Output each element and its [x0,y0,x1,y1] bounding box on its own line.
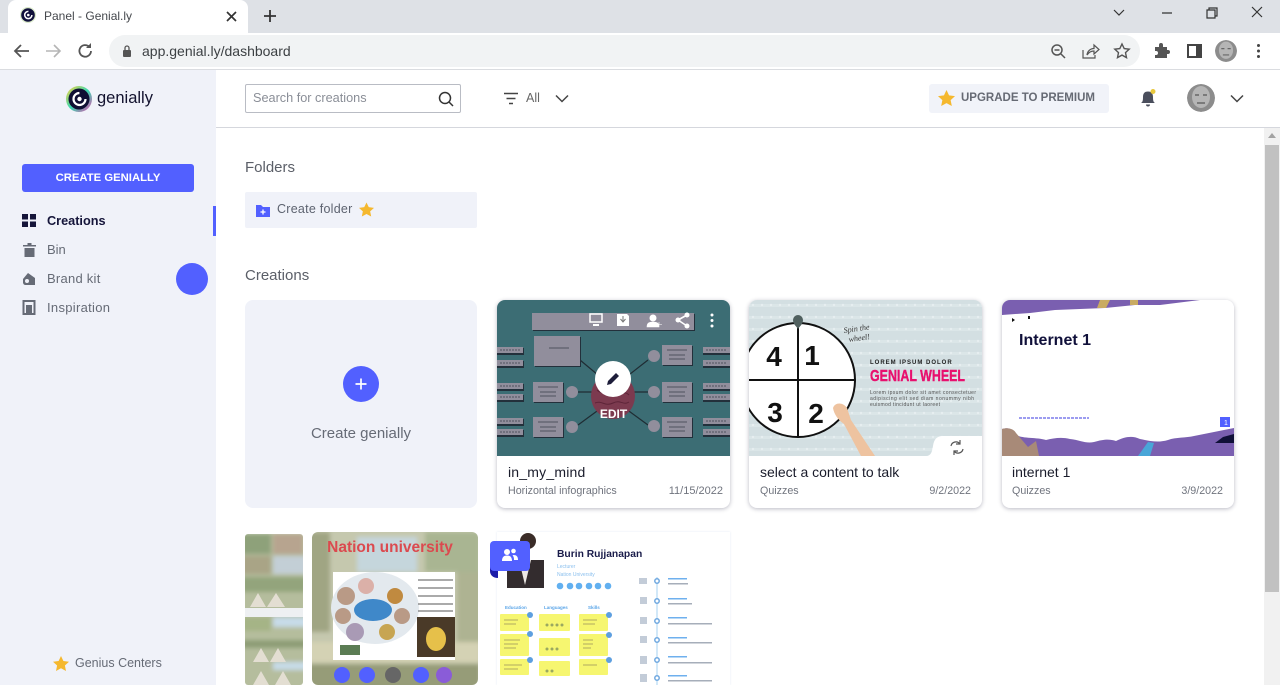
address bar [109,35,1140,67]
thumbnail: genial wheel: euismod tincidunt ut laoreet [870,402,941,408]
nav: brand kit: Brand kit [47,271,101,286]
card title: in_my_mind [508,464,585,480]
logo text: genially [97,89,153,107]
card date: 9/2/2022 [929,485,971,497]
thumbnail: internet 1: 1 [1224,420,1228,427]
card: resume thumbnail: Education [505,605,527,610]
icon: new tab [264,10,276,22]
card type: Quizzes [1012,485,1051,497]
icon: side panel [1187,44,1202,58]
icons: address bar actions [1051,42,1131,59]
card: resume thumbnail: Skills [588,605,600,610]
card: select a content to talk [749,300,982,508]
window controls [1114,6,1262,19]
card title: internet 1 [1012,464,1070,480]
card: nation university thumbnail [245,532,478,685]
nav: creations: Creations [47,214,106,228]
icon: users [502,548,518,561]
nav: bin: Bin [47,242,66,257]
card: in_my_mind [497,300,730,508]
search box: Search for creations [253,91,367,105]
browser toolbar [0,33,1280,69]
genius centers link: Genius Centers [75,656,162,670]
thumbnail: genial wheel: adipiscing elit sed diam nonummy nibh [870,396,974,402]
sidebar [0,70,216,685]
icon: tab close [226,11,236,22]
card title: select a content to talk [760,464,899,480]
filter [504,91,568,105]
icon: nav buttons [14,43,92,58]
upgrade button: UPGRADE TO PREMIUM [961,92,1095,104]
card: internet 1 [1002,300,1234,508]
create folder button [245,192,477,228]
edit label: EDIT [600,407,627,421]
create folder button: Create folder [277,202,353,216]
icon: lock [123,45,131,57]
url: app.genial.ly/dashboard [142,43,291,59]
nav: inspiration: Inspiration [47,300,110,315]
card date: 11/15/2022 [669,485,723,497]
active tab [8,0,248,33]
create label: Create genially [311,425,411,442]
thumbnail: genial wheel: 4 [766,341,782,372]
scrollbar [1264,128,1280,685]
thumbnail: genial wheel: LOREM IPSUM DOLOR [870,360,953,366]
nav: bin [23,242,66,257]
browser tab strip [0,0,1280,33]
floating circle [176,263,208,295]
card: resume thumbnail: Languages [544,605,568,610]
card: resume thumbnail: Nation University [557,572,595,578]
tab title: Panel - Genial.ly [44,9,132,23]
nav: brand kit [23,271,101,286]
icon: user menu chevron [1230,95,1244,102]
card: resume thumbnail: Burin Rujjanapan [557,549,642,560]
thumbnail: internet 1 [1002,300,1234,456]
thumbnail: internet 1: Internet 1 [1019,332,1091,349]
thumbnail: genial wheel [749,300,982,456]
icon: notifications [1141,89,1156,106]
browser profile avatar [1215,40,1237,62]
icon: tab favicon [20,7,36,23]
creations heading: Creations [245,267,309,284]
plus button [343,366,379,402]
thumbnail hover icons [589,312,714,328]
shared badge [490,541,530,578]
user avatar [1187,84,1215,112]
thumbnail: genial wheel: 2 [808,398,824,429]
thumbnail: genial wheel: Spin the [843,322,870,335]
icon: star [359,202,374,216]
card type: Horizontal infographics [508,485,617,497]
icon: extensions [1155,43,1170,58]
thumbnail: genial wheel: wheel! [848,332,871,344]
card: resume thumbnail: Lecturer [557,564,576,570]
icon: browser menu [1257,44,1260,58]
create button: CREATE GENIALLY [56,172,160,184]
card type: Quizzes [760,485,799,497]
thumbnail: genial wheel: 3 [767,397,783,428]
icon: search [438,92,454,106]
active nav marker [213,206,216,236]
card date: 3/9/2022 [1181,485,1223,497]
thumbnail: mind map [497,300,730,456]
card: resume thumbnail [497,532,730,685]
thumbnail: genial wheel: 1 [804,340,820,371]
edit button [595,361,631,397]
create button [22,164,194,192]
thumbnail: genial wheel: Lorem ipsum dolor sit amet consectetuer [870,390,976,396]
thumbnail title: Nation university [327,539,453,556]
create genially card [245,300,477,508]
folders heading: Folders [245,159,295,176]
filter: All [526,91,540,105]
logo [66,86,153,112]
icon: folder plus [256,205,270,217]
top bar [216,70,1280,128]
search box [245,84,461,113]
upgrade button [929,84,1109,113]
